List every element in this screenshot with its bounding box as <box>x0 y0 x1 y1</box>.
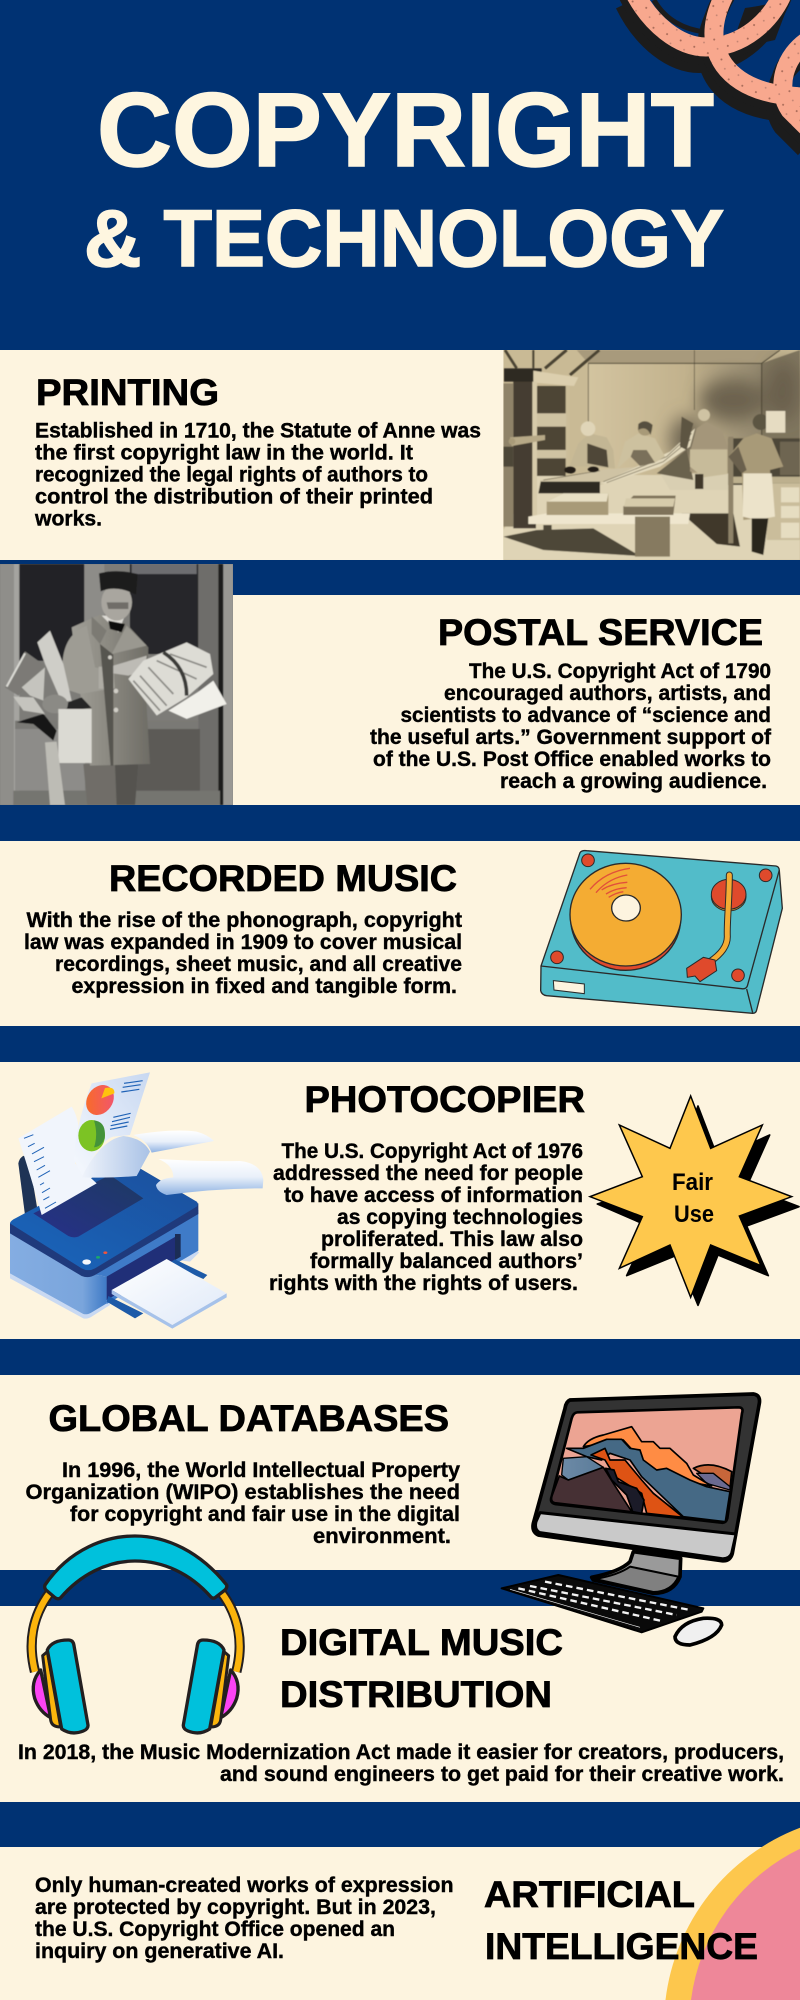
text block: artificial intelligence: the U.S. Copyright Office opened an <box>35 1918 395 1941</box>
text block: postal service: the useful arts.” Government support of <box>370 726 772 749</box>
text block: photocopier: addressed the need for people <box>273 1162 583 1185</box>
text block: photocopier: rights with the rights of users. <box>269 1272 578 1295</box>
icon: turntable <box>541 851 782 1013</box>
heading: digital music distribution: DIGITAL MUSIC <box>280 1622 563 1663</box>
heading: postal service: POSTAL SERVICE <box>438 612 763 653</box>
text block: global databases: In 1996, the World Intellectual Property <box>62 1459 460 1482</box>
image: printing workshop engraving <box>503 350 800 560</box>
icon: decorative peach coil <box>625 0 800 148</box>
text block: printing: control the distribution of their printed <box>35 486 433 508</box>
text block: postal service: encouraged authors, artists, and <box>444 682 771 705</box>
panel: digital music distribution <box>0 1536 800 1802</box>
panel: photocopier <box>0 1062 800 1339</box>
text block: photocopier: proliferated. This law also <box>321 1228 583 1251</box>
text block: recorded music: expression in fixed and tangible form. <box>72 975 457 998</box>
text block: artificial intelligence: Only human-created works of expression <box>35 1874 454 1897</box>
text block: postal service: scientists to advance of “science and <box>400 704 771 727</box>
text block: recorded music <box>24 909 462 998</box>
heading: recorded music: RECORDED MUSIC <box>109 858 457 899</box>
text block: printing: recognized the legal rights of authors to <box>35 464 428 486</box>
heading: artificial intelligence <box>484 1874 758 1967</box>
text block: global databases: environment. <box>313 1525 451 1548</box>
panel: global databases <box>0 1375 800 1570</box>
text block: global databases <box>26 1459 460 1548</box>
text block: printing: works. <box>34 508 102 530</box>
text block: digital music distribution: In 2018, the Music Modernization Act made it easier for creators, producers, <box>18 1741 784 1764</box>
label: fair use <box>672 1169 714 1228</box>
text block: printing: Established in 1710, the Statute of Anne was <box>35 420 481 442</box>
text block: artificial intelligence: are protected by copyright. But in 2023, <box>35 1896 436 1919</box>
icon: headphones <box>32 1536 240 1733</box>
heading: printing: PRINTING <box>36 372 219 413</box>
label: fair use: Fair <box>672 1169 713 1196</box>
text block: postal service: The U.S. Copyright Act of 1790 <box>469 660 771 683</box>
heading: photocopier: PHOTOCOPIER <box>304 1079 585 1120</box>
text block: artificial intelligence: inquiry on generative AI. <box>35 1940 284 1963</box>
panel: printing <box>0 350 800 560</box>
title: COPYRIGHT <box>97 72 714 189</box>
title <box>84 72 724 284</box>
heading: digital music distribution <box>280 1622 563 1715</box>
heading: artificial intelligence: ARTIFICIAL <box>484 1874 695 1915</box>
icon: printer <box>10 1072 263 1329</box>
icon: desktop computer <box>502 1394 760 1645</box>
text block: photocopier: The U.S. Copyright Act of 1976 <box>282 1140 583 1163</box>
text block: photocopier: to have access of information <box>284 1184 583 1207</box>
text block: recorded music: law was expanded in 1909 to cover musical <box>24 931 462 954</box>
text block: postal service: of the U.S. Post Office enabled works to <box>373 748 771 771</box>
heading: artificial intelligence: INTELLIGENCE <box>485 1926 758 1967</box>
heading: digital music distribution: DISTRIBUTION <box>280 1674 552 1715</box>
text block: printing: the first copyright law in the world. It <box>35 442 413 464</box>
text block: digital music distribution <box>18 1741 784 1786</box>
text block: postal service: reach a growing audience. <box>500 770 767 793</box>
text block: global databases: Organization (WIPO) establishes the need <box>26 1481 460 1504</box>
text block: recorded music: With the rise of the phonograph, copyright <box>26 909 462 932</box>
heading: global databases: GLOBAL DATABASES <box>48 1398 449 1439</box>
panel: artificial intelligence <box>0 1828 800 2000</box>
text block: postal service <box>370 660 772 793</box>
image: postal worker photograph <box>0 564 233 805</box>
label: fair use: Use <box>674 1201 714 1228</box>
text block: photocopier: formally balanced authors’ <box>310 1250 583 1273</box>
panel: recorded music <box>0 841 800 1026</box>
text block: photocopier <box>269 1140 583 1295</box>
text block: printing <box>34 420 481 530</box>
text block: photocopier: as copying technologies <box>337 1206 583 1229</box>
callout: fair use star <box>590 1096 799 1305</box>
text block: global databases: for copyright and fair use in the digital <box>70 1503 460 1526</box>
panel: postal service <box>0 564 800 805</box>
text block: digital music distribution: and sound engineers to get paid for their creative work. <box>220 1763 784 1786</box>
graphic: yellow and pink corner arcs <box>666 1828 800 2000</box>
text block: artificial intelligence <box>35 1874 454 1963</box>
title: & TECHNOLOGY <box>84 194 724 284</box>
text block: recorded music: recordings, sheet music, and all creative <box>55 953 462 976</box>
